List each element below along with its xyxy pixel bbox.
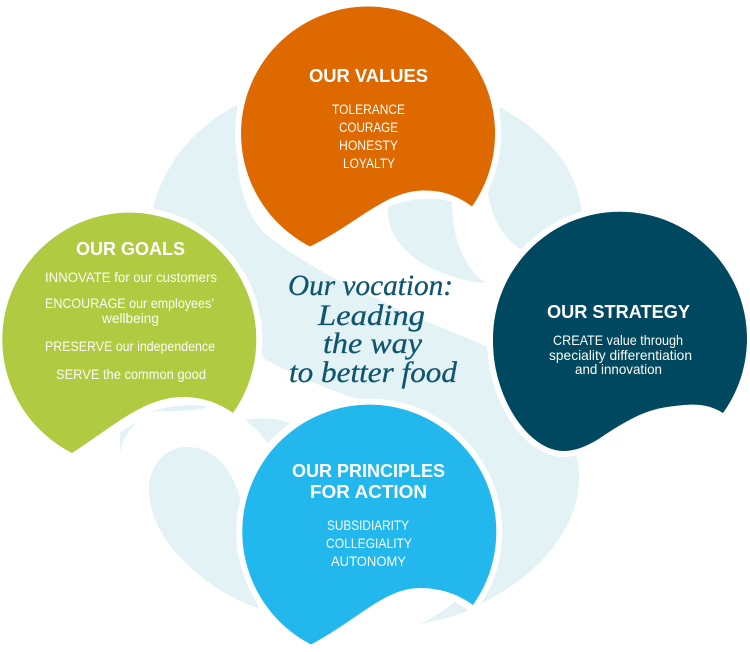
panel: our strategy	[493, 212, 747, 451]
strategy text	[549, 332, 692, 377]
heading: our strategy: OUR STRATEGY	[547, 302, 690, 322]
green blob	[2, 213, 256, 453]
goals list: INNOVATE for our customers	[45, 269, 217, 285]
principles list	[326, 517, 413, 569]
values list: HONESTY	[339, 137, 399, 153]
light blue blob	[242, 405, 496, 644]
goals list: PRESERVE our independence	[45, 338, 215, 354]
goals list	[45, 269, 217, 382]
heading: our values: OUR VALUES	[309, 66, 428, 86]
strategy text: and innovation	[575, 361, 662, 377]
background swirl shapes	[120, 105, 600, 624]
values list	[332, 101, 405, 171]
values list: LOYALTY	[343, 155, 396, 171]
central vocation slogan: the way	[323, 327, 423, 360]
goals list: SERVE the common good	[56, 366, 206, 382]
dark blue blob	[493, 212, 747, 451]
strategy text: CREATE value through	[553, 332, 683, 348]
panel: our values	[241, 7, 495, 246]
heading: our goals: OUR GOALS	[76, 239, 185, 259]
heading: our principles for action: OUR PRINCIPLES	[292, 461, 445, 481]
principles list: AUTONOMY	[331, 553, 407, 569]
strategy text: speciality differentiation	[549, 347, 692, 363]
central vocation slogan	[288, 269, 458, 389]
panel: our goals	[2, 213, 256, 453]
principles list: SUBSIDIARITY	[327, 517, 410, 533]
central vocation slogan: Leading	[317, 299, 425, 332]
heading: our principles for action	[292, 461, 445, 502]
central vocation slogan: Our vocation:	[288, 269, 453, 302]
goals list: ENCOURAGE our employees’	[45, 295, 214, 311]
orange blob	[241, 7, 495, 246]
panel: our principles for action	[242, 405, 496, 644]
goals list: wellbeing	[101, 310, 159, 326]
values list: COURAGE	[339, 119, 398, 135]
heading: our principles for action: FOR ACTION	[310, 482, 427, 502]
values list: TOLERANCE	[332, 101, 405, 117]
principles list: COLLEGIALITY	[326, 535, 413, 551]
central vocation slogan: to better food	[289, 356, 458, 389]
